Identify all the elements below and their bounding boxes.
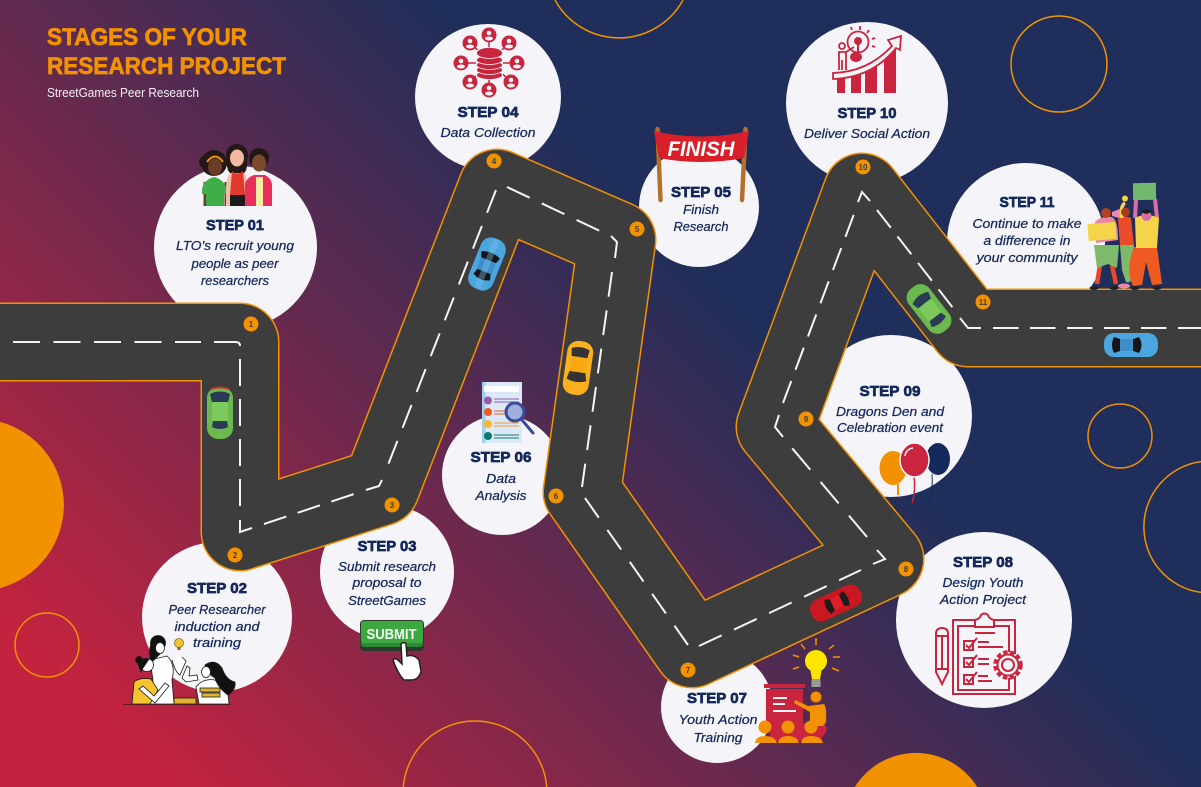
step number markers: 11 — [979, 298, 988, 307]
step number markers: 10 — [859, 163, 868, 172]
step 03 description: StreetGames — [348, 593, 426, 608]
step 07 description: Training — [694, 730, 743, 745]
step 08 description: Design Youth — [942, 575, 1024, 590]
step 04 label: STEP 04 — [458, 104, 519, 121]
title — [47, 24, 286, 80]
panel: step 02 — [123, 542, 292, 704]
car: blue after step 11 — [1104, 333, 1158, 357]
step 03 label: STEP 03 — [358, 538, 416, 555]
icon: data collection network — [454, 28, 524, 98]
step 07 description — [678, 712, 758, 745]
panel: step 06 — [442, 382, 562, 535]
step 01 description: people as peer — [190, 256, 279, 271]
icon: balloons — [880, 443, 950, 503]
icon: protesters with signs — [1087, 183, 1162, 290]
icon: three young people — [199, 144, 272, 206]
panel: step 04 — [415, 24, 561, 170]
step 02 description: induction and — [174, 619, 260, 634]
step 03 description: Submit research — [338, 559, 436, 574]
step 05 description: Finish — [683, 202, 719, 217]
car: yellow on step 5-6 — [561, 339, 595, 397]
step number markers: 4 — [492, 157, 497, 166]
panel: step 11 — [947, 163, 1105, 321]
car: green on step 10-11 — [902, 280, 956, 338]
step 02 description: Peer Researcher — [168, 602, 266, 617]
step 08 description: Action Project — [939, 592, 1027, 607]
panel: step 01 — [154, 144, 317, 328]
icon: clipboard, pencil and gear — [936, 614, 1021, 694]
step 08 label: STEP 08 — [953, 554, 1013, 571]
road centre line — [13, 187, 1201, 646]
title: STAGES OF YOUR — [47, 24, 247, 51]
step number markers: 8 — [904, 565, 909, 574]
step 11 description: a difference in — [984, 233, 1070, 248]
step 02 label: STEP 02 — [187, 580, 247, 597]
step 01 description: researchers — [201, 273, 269, 288]
step number markers: 1 — [249, 320, 254, 329]
step 01 description — [176, 238, 295, 288]
icon: submit button with hand — [360, 620, 424, 680]
step number markers: 5 — [635, 225, 640, 234]
step number markers — [228, 154, 990, 678]
step 10 description: Deliver Social Action — [804, 126, 930, 141]
panel: step 09 — [810, 335, 972, 503]
step 06 description: Analysis — [474, 488, 527, 503]
step 09 label: STEP 09 — [860, 383, 920, 400]
step 09 description: Celebration event — [837, 420, 944, 435]
car: red on step 7-8 — [807, 581, 865, 625]
step 06 description — [474, 471, 527, 503]
car: blue on step 3-4 — [465, 234, 509, 294]
step 09 description — [836, 404, 945, 435]
step 02 description — [168, 602, 266, 650]
step number markers: 6 — [554, 492, 559, 501]
step 01 description: LTO’s recruit young — [176, 238, 295, 253]
panel: step 05 — [639, 129, 759, 267]
panel: step 07 — [661, 638, 840, 763]
step 06 label: STEP 06 — [470, 449, 532, 466]
step 03 description — [338, 559, 436, 608]
icon: presenter with lightbulb — [755, 638, 840, 743]
car: green on step 1-2 — [207, 387, 233, 439]
step number markers: 7 — [686, 666, 691, 675]
icon: finish banner: FINISH — [668, 138, 735, 161]
step 09 description: Dragons Den and — [836, 404, 945, 419]
step 11 label: STEP 11 — [1000, 194, 1054, 211]
subtitle: StreetGames Peer Research — [47, 86, 199, 100]
step 07 description: Youth Action — [678, 712, 758, 727]
step 07 label: STEP 07 — [687, 690, 747, 707]
step 11 description: Continue to make — [972, 216, 1082, 231]
step number markers: 9 — [804, 415, 809, 424]
step 05 description — [674, 202, 728, 234]
icon: growth chart with idea — [833, 26, 901, 93]
step 01 label: STEP 01 — [206, 217, 264, 234]
step number markers: 3 — [390, 501, 395, 510]
panel: step 10 — [786, 22, 948, 184]
icon: submit button with hand: SUBMIT — [366, 626, 416, 643]
title: RESEARCH PROJECT — [47, 53, 286, 80]
step 06 description: Data — [486, 471, 516, 486]
panel: step 08 — [896, 532, 1072, 708]
step 08 description — [939, 575, 1027, 607]
step number markers: 2 — [233, 551, 238, 560]
step 11 description — [972, 216, 1082, 265]
step 10 label: STEP 10 — [838, 105, 896, 122]
step 11 description: your community — [975, 250, 1079, 265]
step 05 description: Research — [674, 219, 728, 234]
icon: document with magnifier — [482, 382, 533, 443]
step 02 description: training — [193, 635, 242, 650]
step 03 description: proposal to — [351, 575, 422, 590]
road — [0, 188, 1201, 649]
panel: step 03 — [320, 505, 454, 680]
step 04 description: Data Collection — [440, 125, 536, 140]
icon: students talking — [123, 636, 235, 704]
step 05 label: STEP 05 — [671, 184, 731, 201]
